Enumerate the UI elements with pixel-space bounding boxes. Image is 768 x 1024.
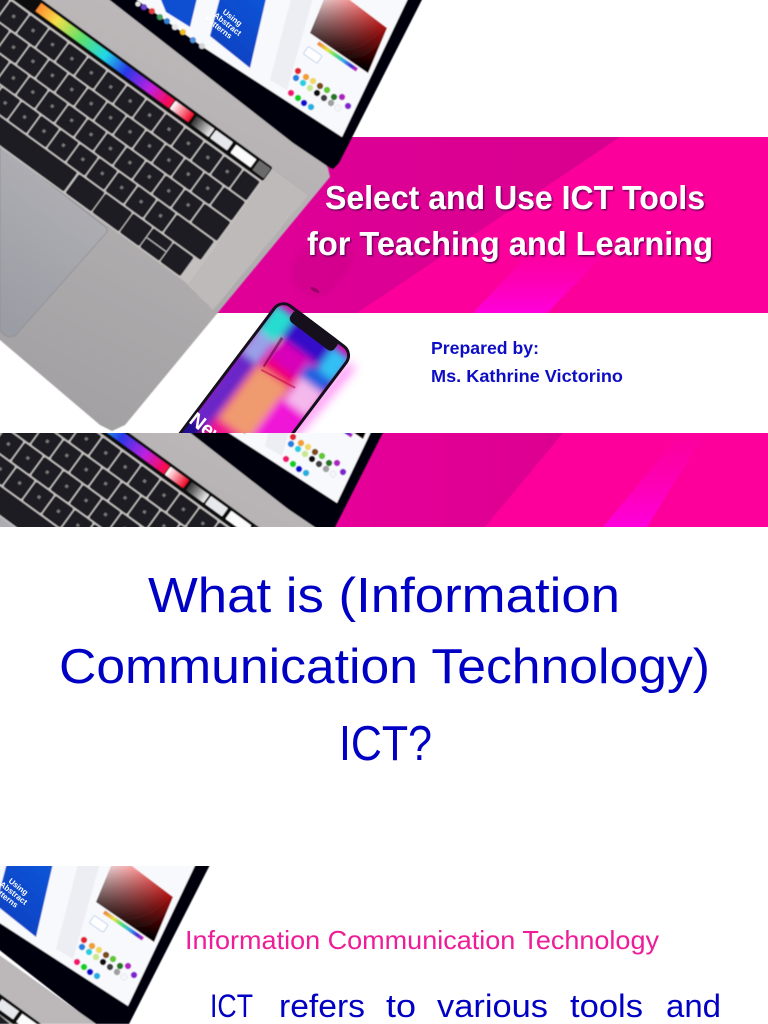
author credit bbox=[431, 338, 623, 386]
heading: what is ICT: What is (Information bbox=[148, 569, 620, 623]
poster label on third slide bbox=[0, 870, 34, 913]
body text: tools bbox=[570, 988, 643, 1024]
body text: various bbox=[437, 988, 548, 1024]
image: laptop in second banner bbox=[0, 433, 384, 527]
title: for Teaching and Learning bbox=[307, 225, 713, 262]
body text: refers bbox=[279, 988, 365, 1024]
body text bbox=[210, 988, 721, 1024]
body text: to bbox=[386, 988, 416, 1024]
title: Select and Use ICT Tools bbox=[325, 179, 705, 216]
author credit: Prepared by: bbox=[431, 338, 539, 358]
poster label on laptop screen bbox=[203, 1, 248, 44]
poster label on third slide: Using bbox=[7, 876, 30, 897]
poster label on laptop screen: Patterns bbox=[203, 14, 234, 41]
image: laptop on first slide bbox=[0, 0, 423, 432]
author credit: Ms. Kathrine Victorino bbox=[431, 366, 623, 386]
body text: and bbox=[666, 988, 721, 1024]
body text: ICT bbox=[210, 988, 253, 1024]
title bbox=[307, 179, 713, 262]
panel: top pink banner bbox=[200, 137, 768, 313]
poster label on laptop screen: Using bbox=[221, 7, 244, 28]
panel: second pink banner bbox=[330, 433, 768, 527]
poster label on laptop screen: Abstract bbox=[212, 11, 243, 38]
subheading: Information Communication Technology: Information Communication Technology bbox=[185, 925, 659, 955]
heading: what is ICT bbox=[59, 569, 710, 771]
icon: earbud case on banner bbox=[282, 224, 362, 306]
image: laptop screen on third slide bbox=[0, 866, 210, 1024]
icon: phone with glow: New bbox=[185, 409, 231, 452]
heading: what is ICT: Communication Technology) bbox=[59, 640, 710, 694]
heading: what is ICT: ICT? bbox=[339, 717, 432, 771]
icon: phone with glow bbox=[178, 302, 360, 452]
